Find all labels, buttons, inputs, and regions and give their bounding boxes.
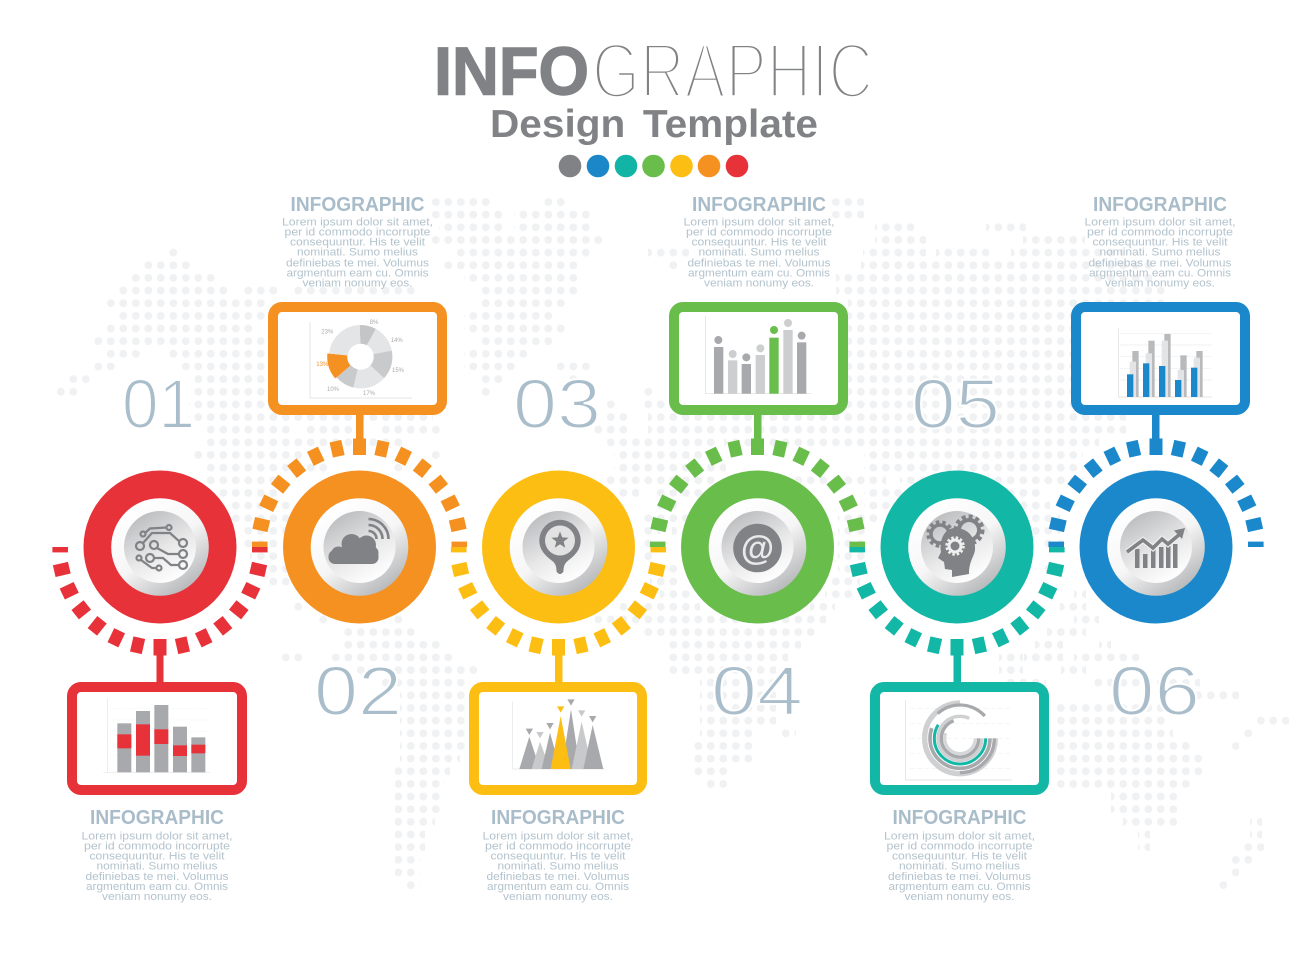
number 03: 03	[513, 365, 601, 443]
text block: step 2: consequuntur. His te velit	[290, 236, 425, 248]
text block: step 2: Lorem ipsum dolor sit amet,	[282, 216, 433, 228]
text block: step 2: per id commodo incorrupte	[284, 226, 430, 238]
donut chart: 23%	[321, 330, 334, 336]
donut chart: 15%	[392, 368, 405, 374]
icon: at sign	[733, 524, 782, 572]
text block: step 6: Lorem ipsum dolor sit amet,	[1084, 216, 1236, 228]
dashed arc: step 2 orange	[252, 438, 467, 547]
text block: step 1: nominati. Sumo melius	[96, 860, 218, 872]
dashed arc: step 3 yellow	[451, 547, 666, 656]
dashed arc: step 6 blue	[1048, 438, 1264, 547]
text block: step 5: Lorem ipsum dolor sit amet,	[884, 830, 1035, 842]
title word: GRAPHIC (thin): GRAPHIC	[592, 26, 873, 114]
panel: step 6 chart box	[1076, 307, 1245, 444]
text block: step 5: nominati. Sumo melius	[899, 860, 1021, 872]
dashed arc: step 5 teal	[849, 547, 1065, 656]
text block: step 1: per id commodo incorrupte	[84, 840, 230, 852]
dashed arc: step 4 green	[650, 438, 865, 547]
text block: step 5: consequuntur. His te velit	[892, 850, 1027, 862]
number 04: 04	[711, 652, 803, 730]
text block: step 4: definiebas te mei. Volumus	[688, 258, 831, 270]
text block: step 6	[1084, 194, 1236, 290]
text block: step 6: veniam nonumy eos.	[1105, 278, 1215, 290]
text block: step 6: per id commodo incorrupte	[1087, 226, 1233, 238]
step 3 circle with location pin icon	[482, 470, 635, 624]
text block: step 6: nominati. Sumo melius	[1100, 246, 1221, 258]
text block: step 1: argmentum eam cu. Omnis	[86, 881, 229, 893]
mountain peak chart	[513, 699, 605, 769]
step 1 circle with circuit icon	[84, 470, 236, 624]
panel: step 3 chart box	[474, 650, 642, 790]
text block: step 2: definiebas te mei. Volumus	[286, 258, 430, 270]
text block: step 2: argmentum eam cu. Omnis	[286, 268, 429, 280]
text block: step 2: nominati. Sumo melius	[297, 246, 419, 258]
text block: step 4: nominati. Sumo melius	[698, 246, 820, 258]
text block: step 5: definiebas te mei. Volumus	[888, 871, 1032, 883]
donut chart: 14%	[391, 338, 403, 344]
text block: step 4: argmentum eam cu. Omnis	[688, 268, 831, 280]
donut chart: 17%	[363, 391, 376, 397]
icon: growth chart with arrow	[1127, 528, 1185, 568]
number 02: 02	[314, 652, 402, 730]
donut chart: 10%	[327, 387, 340, 393]
text block: step 5	[884, 807, 1035, 903]
subtitle: Design Template	[490, 103, 818, 146]
lollipop bar chart	[705, 316, 812, 394]
text block: step 3: consequuntur. His te velit	[490, 850, 626, 862]
donut chart: 13%	[316, 362, 329, 368]
stacked bar chart	[103, 698, 210, 772]
dashed arc: step 1 red	[52, 547, 268, 656]
number 01: 01	[122, 365, 195, 443]
text block: step 6: INFOGRAPHIC	[1093, 194, 1227, 216]
text block: step 3	[482, 807, 634, 903]
panel: step 2 chart box	[273, 307, 442, 444]
text block: step 3: INFOGRAPHIC	[491, 807, 625, 829]
step 2 circle with cloud icon	[283, 470, 436, 624]
text block: step 1: INFOGRAPHIC	[90, 807, 224, 829]
text block: step 2: veniam nonumy eos.	[302, 278, 412, 290]
text block: step 3: nominati. Sumo melius	[498, 860, 619, 872]
text block: step 5: veniam nonumy eos.	[904, 891, 1014, 903]
text block: step 3: Lorem ipsum dolor sit amet,	[482, 830, 634, 842]
donut chart	[310, 320, 412, 398]
text block: step 2	[282, 194, 433, 290]
donut chart: 8%	[370, 320, 379, 326]
step 5 circle with head and gears icon	[880, 470, 1034, 624]
text block: step 5: INFOGRAPHIC	[892, 807, 1026, 829]
text block: step 3: definiebas te mei. Volumus	[486, 871, 630, 883]
text block: step 6: argmentum eam cu. Omnis	[1089, 268, 1232, 280]
icon: at sign: @	[741, 530, 774, 568]
text block: step 1	[82, 807, 232, 903]
panel: step 1 chart box	[72, 650, 242, 790]
text block: step 3: argmentum eam cu. Omnis	[487, 881, 630, 893]
panel: step 5 chart box	[875, 650, 1044, 790]
number 06: 06	[1109, 652, 1200, 730]
colour dots row	[559, 155, 748, 177]
text block: step 1: veniam nonumy eos.	[102, 891, 212, 903]
text block: step 4: INFOGRAPHIC	[692, 194, 826, 216]
text block: step 4: veniam nonumy eos.	[704, 278, 814, 290]
icon: cloud and signal	[328, 519, 388, 564]
text block: step 3: per id commodo incorrupte	[485, 840, 631, 852]
radial arc chart	[905, 700, 1012, 780]
text block: step 4: consequuntur. His te velit	[692, 236, 826, 248]
text block: step 6: definiebas te mei. Volumus	[1088, 258, 1232, 270]
icon: location pin with star	[539, 520, 581, 574]
text block: step 5: per id commodo incorrupte	[886, 840, 1032, 852]
step 4 circle with at-sign icon	[681, 470, 834, 624]
title	[434, 26, 873, 146]
text block: step 1: consequuntur. His te velit	[90, 850, 224, 862]
background: dotted world map	[56, 202, 1289, 885]
number 05: 05	[911, 365, 1000, 443]
icon: circuit	[136, 525, 187, 570]
title word: INFO (bold): INFO	[434, 34, 589, 110]
text block: step 1: Lorem ipsum dolor sit amet,	[82, 830, 232, 842]
step 6 circle with growth chart icon	[1080, 470, 1232, 624]
text block: step 4	[684, 194, 834, 290]
panel: step 4 chart box	[674, 307, 843, 444]
text block: step 6: consequuntur. His te velit	[1092, 236, 1228, 248]
text block: step 3: veniam nonumy eos.	[503, 891, 613, 903]
icon: head with gears	[928, 516, 982, 577]
text block: step 4: Lorem ipsum dolor sit amet,	[684, 216, 834, 228]
text block: step 1: definiebas te mei. Volumus	[86, 871, 229, 883]
text block: step 5: argmentum eam cu. Omnis	[888, 881, 1031, 893]
text block: step 4: per id commodo incorrupte	[686, 226, 832, 238]
grouped bar chart	[1118, 328, 1212, 397]
text block: step 2: INFOGRAPHIC	[290, 194, 424, 216]
